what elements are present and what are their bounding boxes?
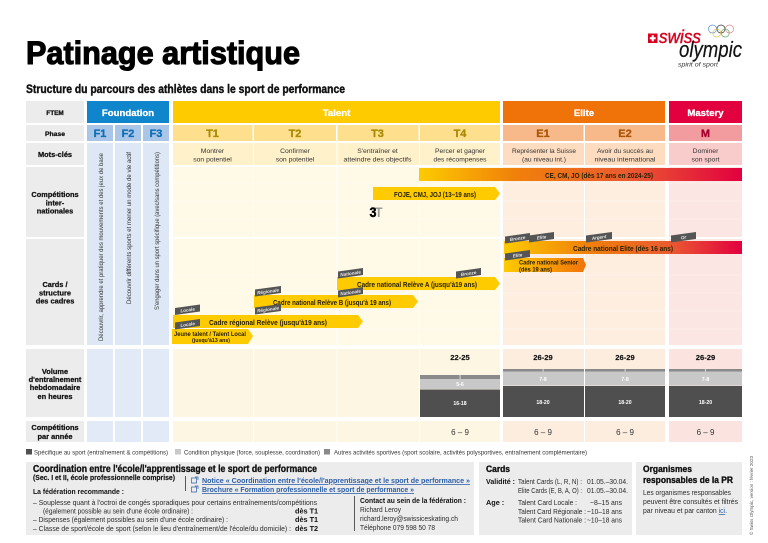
- phase row: T1: [206, 128, 219, 140]
- keywords row: Confirmer: [280, 148, 311, 155]
- keywords row: [173, 143, 742, 165]
- competitions per year row: 6 – 9: [697, 428, 715, 437]
- card tags: Nationale: [340, 289, 362, 296]
- row labels: par année: [38, 432, 72, 441]
- icon: 3T: [370, 204, 383, 220]
- panel: cards: 01.05.–30.04.: [587, 477, 628, 486]
- panel: coordination: – Dispenses (également possibles au sein d'une école ordinaire) :: [33, 515, 228, 524]
- card tags: Or: [681, 235, 687, 240]
- chart background: competitions and cards: [173, 167, 742, 345]
- copyright: © Swiss Olympic, version : février 2023: [748, 456, 754, 535]
- competitions per year row: 6 – 9: [534, 428, 552, 437]
- panel: cards: Elite Cards (E, B, A, O) :: [518, 486, 582, 495]
- panel: cards: Validité :: [486, 477, 515, 486]
- FTEM band: Elite: Elite: [574, 108, 594, 119]
- contact block: Contact au sein de la fédération :: [360, 496, 466, 505]
- keywords row: Représenter la Suisse: [512, 148, 576, 155]
- competitions per year row: 6 – 9: [616, 428, 634, 437]
- stacked bar: M: 18-20: [699, 400, 712, 406]
- keywords row: son potentiel: [193, 156, 232, 164]
- panel: cards: ~10–18 ans: [587, 507, 622, 516]
- bar: Cadre national Elite: [504, 241, 742, 254]
- keywords row: Avoir du succès au: [597, 148, 653, 155]
- logo: swiss olympic: [648, 25, 742, 68]
- panel: coordination: La fédération recommande :: [33, 487, 124, 496]
- legend: [26, 449, 587, 456]
- FTEM band: Foundation: [87, 101, 169, 123]
- logo: swiss olympic: spirit of sport: [678, 62, 719, 68]
- phase row: F3: [150, 128, 162, 140]
- keywords row: niveau international: [594, 156, 656, 164]
- FTEM band: Mastery: Mastery: [687, 108, 724, 119]
- panel: organismes: Les organismes responsables: [643, 488, 731, 497]
- logo: swiss olympic: olympic: [679, 37, 742, 62]
- competitions per year row: 6 – 9: [451, 428, 469, 437]
- panel: cards: Talent Card Locale :: [518, 498, 577, 507]
- panel: cards: Talent Card Nationale :: [518, 516, 586, 524]
- row labels: [26, 101, 84, 442]
- panel: cards: Cards: [486, 463, 510, 474]
- card tags: Nationale: [340, 270, 362, 277]
- panel: cards: Talent Card Régionale :: [518, 507, 586, 516]
- keywords row: Montrer: [201, 148, 225, 155]
- keywords row: des récompenses: [434, 156, 487, 164]
- card tags: Locale: [180, 321, 196, 328]
- panel: organismes: par niveau et par canton ici.: [643, 506, 727, 515]
- bar: Cadre national Senior: (dès 19 ans): [519, 266, 552, 274]
- row labels: des cadres: [36, 296, 74, 306]
- FTEM band: Talent: [173, 101, 500, 123]
- Foundation columns with vertical text: Découvrir, apprendre et pratiquer des mouvements et des jeux de base: [98, 153, 105, 341]
- stacked bar: T4: 22-25: [450, 353, 470, 362]
- link: notice: Notice « Coordination entre l'école/l'apprentissage et le sport de performance »: [202, 476, 470, 485]
- panel: organismes: responsables de la PR: [643, 474, 733, 485]
- panel: cards: Age :: [486, 498, 504, 507]
- FTEM band: Foundation: Foundation: [102, 108, 154, 119]
- stacked bar: E1: 26-29: [533, 353, 553, 362]
- panel: organismes: Organismes: [643, 463, 692, 474]
- logo: swiss olympic: swiss: [659, 27, 701, 47]
- panel: organismes: peuvent être consultés et filtrés: [643, 497, 738, 506]
- FTEM band: Elite: [503, 101, 665, 123]
- card tags: Bronze: [510, 235, 526, 242]
- row labels: Phase: [45, 131, 65, 138]
- panel: cards: 01.05.–30.04.: [587, 486, 628, 495]
- row labels: Mots-clés: [38, 150, 72, 159]
- keywords row: son potentiel: [276, 156, 315, 164]
- Foundation columns with vertical text: S'engager dans un sport spécifique (avec/sans compétitions): [154, 152, 161, 310]
- subtitle: Structure du parcours des athlètes dans le sport de performance: [26, 84, 345, 96]
- volume row background: [87, 349, 742, 417]
- bar: CE, CM, JO: CE, CM, JO (dès 17 ans en 2024-25): [545, 171, 653, 180]
- bar: Cadre national Elite: Cadre national Elite (dès 16 ans): [573, 244, 673, 253]
- card tags: Argent: [590, 234, 607, 241]
- phase row: F2: [122, 128, 134, 140]
- bar: CE, CM, JO: [419, 168, 742, 181]
- Foundation columns with vertical text: Découvrir différents sports et mener un mode de vie actif: [126, 152, 133, 304]
- stacked bar: M: 26-29: [696, 353, 715, 362]
- stacked bar: T4: 16-18: [453, 401, 467, 407]
- phase row: M: [701, 128, 710, 140]
- panel: coordination: Coordination entre l'école/l'apprentissage et le sport de performance: [33, 463, 317, 475]
- stacked bar: M: 7-8: [702, 377, 709, 383]
- bar: Cadre national Relève A: Cadre national Relève A (jusqu'à19 ans): [357, 280, 477, 289]
- row labels: Cards /: [42, 280, 68, 289]
- keywords row: son sport: [692, 156, 720, 164]
- keywords row: S'entraîner et: [357, 148, 398, 155]
- phase row: T2: [289, 128, 301, 140]
- stacked bar: M: [669, 353, 742, 417]
- row labels: nationales: [37, 206, 73, 216]
- row labels: en heures: [38, 392, 72, 401]
- phase row: T4: [454, 128, 467, 140]
- panel: coordination: dès T1: [295, 515, 318, 524]
- panel: coordination: – Souplesse quant à l'octroi de congés sporadiques pour certains entraînements/compétitions: [33, 498, 317, 507]
- card tags: Régionale: [257, 305, 280, 313]
- stacked bar: E1: 18-20: [536, 400, 550, 406]
- icon: 3T: 3: [370, 204, 377, 220]
- phase row: [87, 125, 742, 141]
- bar: Cadre national Relève A: [337, 277, 500, 290]
- row labels: Volume: [42, 367, 68, 376]
- phase row: T3: [371, 128, 384, 140]
- bar: Cadre national Senior: Cadre national Senior: [519, 260, 578, 266]
- phase row: E2: [618, 128, 632, 140]
- contact block: Richard Leroy: [360, 505, 401, 514]
- panel: organismes: [636, 462, 742, 535]
- row labels: hebdomadaire: [30, 383, 80, 392]
- panel: coordination: dès T2: [295, 524, 318, 533]
- bar: Cadre national Relève B: [254, 295, 418, 308]
- stacked bar: E1: 7-8: [539, 377, 547, 383]
- keywords row: atteindre des objectifs: [344, 156, 412, 164]
- card tags: Bronze: [461, 270, 477, 277]
- legend: Condition physique (force, souplesse, coordination): [184, 450, 320, 456]
- row labels: d'entraînement: [29, 375, 82, 384]
- bar: Jeune talent: [172, 329, 253, 344]
- FTEM band: Talent: Talent: [323, 108, 351, 119]
- panel: coordination: (Sec. I et II, école professionnelle comprise): [33, 473, 176, 482]
- bar: FOJE, CMJ, JOJ: FOJE, CMJ, JOJ (13–19 ans): [394, 190, 476, 199]
- bar: Cadre national Senior: [504, 258, 586, 274]
- legend: Spécifique au sport (entraînement & compétitions): [34, 450, 168, 456]
- contact block: Téléphone 079 598 50 78: [360, 523, 435, 532]
- bar: Jeune talent: Jeune talent / Talent Local: [174, 331, 246, 338]
- bar: Cadre régional Relève: Cadre régional Relève (jusqu'à19 ans): [209, 318, 327, 327]
- row labels: inter-: [46, 198, 65, 208]
- card tags: Elite: [536, 234, 547, 241]
- panel: coordination: dès T1: [295, 506, 318, 516]
- FTEM band: Mastery: [669, 101, 742, 123]
- bar: Jeune talent: (jusqu'à13 ans): [192, 338, 230, 344]
- panel: coordination: – Classe de sport/école de sport (selon le lieu d'entraînement/de l'école/du domicile) :: [33, 524, 291, 533]
- keywords row: Dominer: [693, 148, 719, 155]
- panel: cards: ~8–15 ans: [590, 498, 622, 507]
- link: brochure: Brochure « Formation professionnelle et sport de performance »: [202, 485, 414, 494]
- stacked bar: T4: 5-6: [456, 382, 464, 388]
- icon: external link: [192, 486, 198, 492]
- panel: coordination: [26, 462, 474, 535]
- card tags: Régionale: [257, 287, 280, 295]
- row labels: Compétitions: [31, 423, 79, 432]
- keywords row: (au niveau int.): [522, 156, 566, 164]
- legend: Autres activités sportives (sport scolaire, activités polysportives, entraînement complémentaire): [334, 450, 587, 456]
- stacked bar: E1: [503, 353, 584, 417]
- stacked bar: E2: 26-29: [615, 353, 635, 362]
- card tags: Elite: [512, 252, 523, 259]
- phase row: F1: [94, 128, 106, 140]
- card tags: [175, 232, 696, 330]
- title: Patinage artistique: [26, 35, 300, 71]
- row labels: structure: [39, 288, 71, 298]
- bar: Cadre national Relève B: Cadre national Relève B (jusqu'à 19 ans): [273, 298, 391, 307]
- contact block: [360, 496, 466, 532]
- bar: Cadre régional Relève: [173, 315, 363, 328]
- panel: cards: [479, 462, 632, 535]
- icon: external link: [192, 477, 198, 483]
- stacked bar: T4: [420, 353, 500, 417]
- row labels: FTEM: [46, 110, 64, 117]
- card tags: Locale: [180, 306, 196, 313]
- panel: coordination: (également possible au sein d'une école ordinaire) :: [43, 506, 193, 516]
- panel: cards: Talent Cards (L, R, N) :: [518, 477, 582, 486]
- bar: FOJE, CMJ, JOJ: [373, 187, 500, 200]
- row labels: Compétitions: [31, 190, 79, 199]
- Foundation columns with vertical text: [87, 143, 169, 345]
- stacked bar: E2: 7-8: [621, 377, 629, 383]
- phase row: E1: [536, 128, 550, 140]
- competitions per year row: [87, 421, 742, 442]
- keywords row: Percer et gagner: [435, 148, 486, 155]
- stacked bar: E2: [585, 353, 665, 417]
- contact block: richard.leroy@swissiceskating.ch: [360, 514, 458, 523]
- panel: cards: ~10–18 ans: [587, 516, 622, 524]
- icon: 3T: T: [375, 204, 383, 220]
- stacked bar: E2: 18-20: [618, 400, 632, 406]
